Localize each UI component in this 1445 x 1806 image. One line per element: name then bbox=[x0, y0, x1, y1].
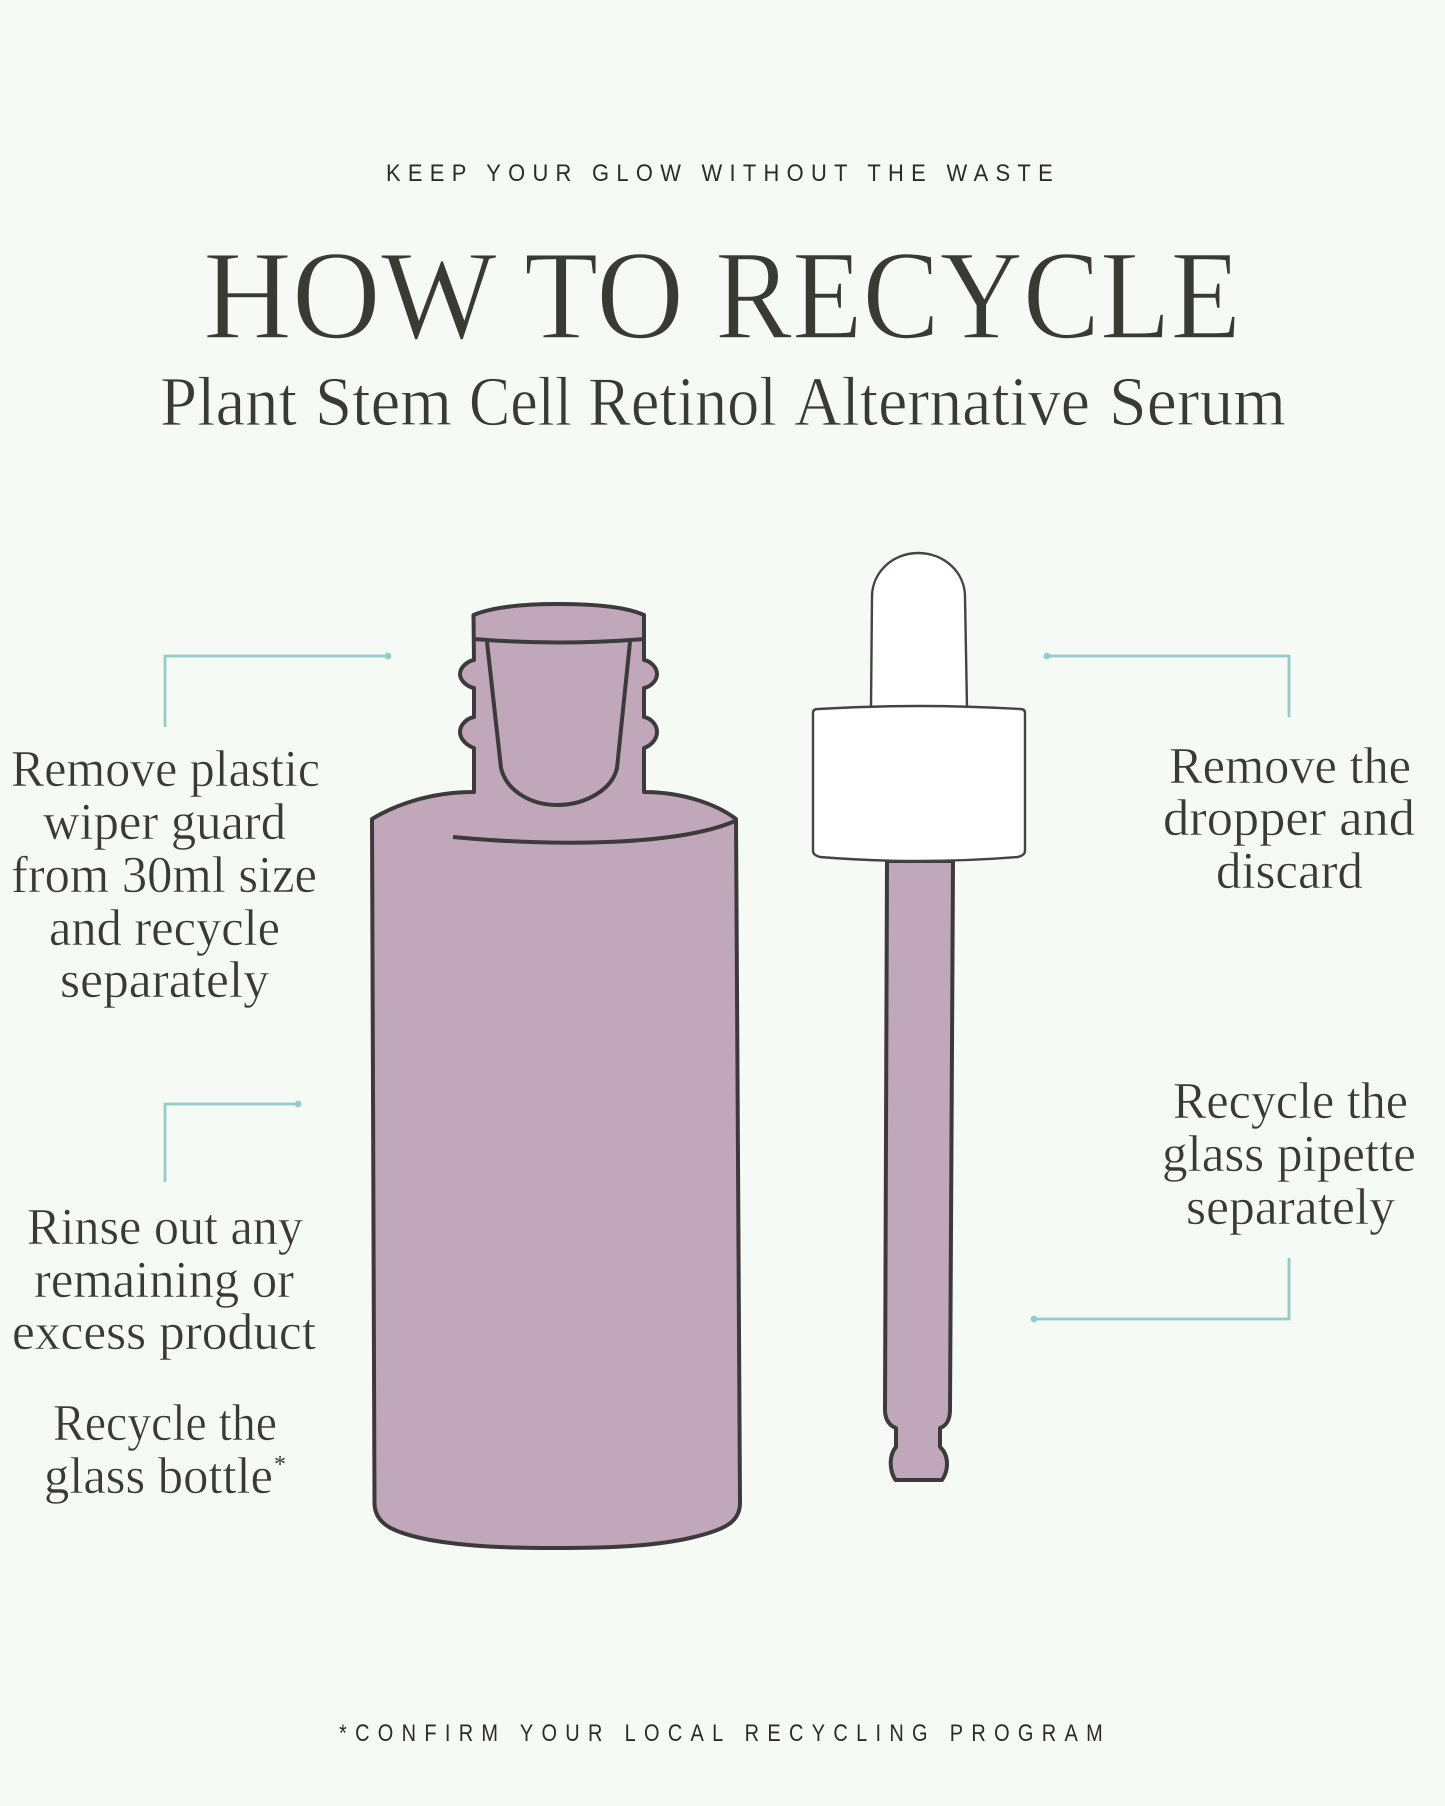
step text: remove wiper guard: separately bbox=[60, 952, 269, 1009]
step text: recycle glass bottle: * bbox=[274, 1452, 286, 1478]
eyebrow tagline: KEEP YOUR GLOW WITHOUT THE WASTE bbox=[386, 160, 1060, 187]
title bbox=[203, 226, 1241, 366]
connector: wiper guard bbox=[165, 653, 391, 727]
illustration: dropper bbox=[813, 553, 1025, 1480]
title: HOW bbox=[203, 226, 497, 366]
step text: remove wiper guard: wiper guard bbox=[43, 794, 286, 851]
step text: rinse out product bbox=[12, 1199, 317, 1361]
step text: remove wiper guard: from 30ml size bbox=[11, 847, 317, 904]
step text: remove wiper guard bbox=[11, 741, 320, 1009]
illustration: glass bottle bbox=[372, 604, 740, 1548]
step text: remove dropper: discard bbox=[1216, 843, 1363, 900]
subtitle: Cell bbox=[469, 364, 572, 441]
connector: remove dropper bbox=[1044, 653, 1289, 717]
dropper rubber bulb bbox=[871, 553, 967, 708]
subtitle: Alternative bbox=[794, 364, 1090, 441]
step text: recycle glass bottle: Recycle the bbox=[53, 1395, 277, 1452]
step text: recycle glass bottle: glass bottle bbox=[44, 1448, 273, 1505]
step text: remove dropper: dropper and bbox=[1163, 790, 1415, 847]
step text: recycle pipette bbox=[1162, 1073, 1416, 1236]
step text: recycle glass bottle bbox=[44, 1395, 286, 1505]
subtitle: Stem bbox=[315, 364, 452, 441]
step text: remove wiper guard: and recycle bbox=[49, 900, 280, 957]
title: TO bbox=[524, 226, 684, 366]
step text: recycle pipette: separately bbox=[1186, 1179, 1395, 1236]
dropper glass pipette bbox=[885, 861, 953, 1480]
title: RECYCLE bbox=[715, 226, 1241, 366]
subtitle: Serum bbox=[1109, 364, 1286, 441]
step text: rinse out product: remaining or bbox=[34, 1252, 294, 1309]
step text: remove dropper bbox=[1163, 738, 1415, 900]
footnote: *CONFIRM YOUR LOCAL RECYCLING PROGRAM bbox=[339, 1720, 1111, 1747]
connector: rinse bottle bbox=[165, 1101, 301, 1182]
step text: remove wiper guard: Remove plastic bbox=[11, 741, 320, 798]
subtitle bbox=[160, 364, 1286, 441]
dropper collar bbox=[813, 706, 1025, 861]
step text: recycle pipette: Recycle the bbox=[1173, 1073, 1408, 1130]
subtitle: Plant bbox=[160, 364, 298, 441]
subtitle: Retinol bbox=[588, 364, 777, 441]
step text: rinse out product: excess product bbox=[12, 1304, 317, 1361]
step text: recycle pipette: glass pipette bbox=[1162, 1126, 1416, 1183]
step text: rinse out product: Rinse out any bbox=[27, 1199, 303, 1256]
connector: glass pipette bbox=[1031, 1258, 1289, 1322]
step text: remove dropper: Remove the bbox=[1169, 738, 1411, 795]
